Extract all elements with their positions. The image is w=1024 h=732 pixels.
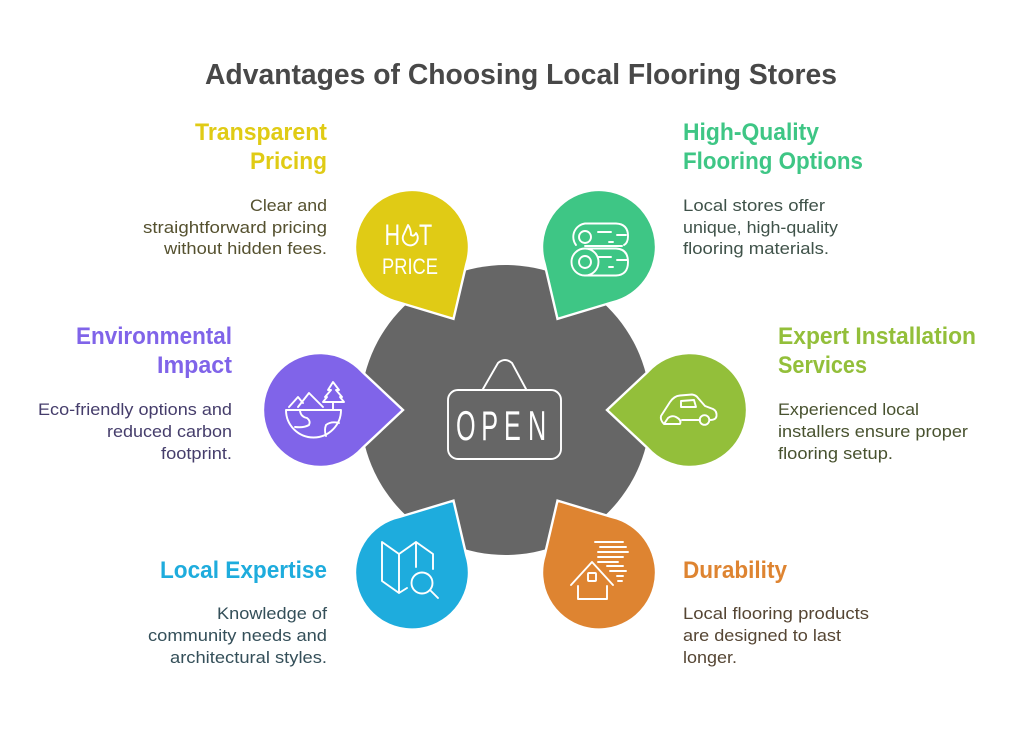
text block: transparent pricing: Clear and [250, 196, 327, 215]
text block: environmental impact: reduced carbon [107, 422, 232, 441]
text block: environmental impact: Impact [157, 352, 232, 379]
icon: car [661, 394, 717, 425]
text block: expert installation services: Experienced local [778, 400, 919, 419]
panel: local expertise drop [334, 472, 503, 650]
icon: hot price tag [382, 217, 438, 279]
text block: local expertise [148, 557, 327, 667]
text block: high-quality flooring options: unique, high-quality [683, 218, 839, 237]
text block: durability: Durability [683, 557, 788, 584]
text block: high-quality flooring options [683, 119, 863, 258]
icon: open sign: OPEN [456, 404, 546, 450]
panel: transparent pricing drop [334, 169, 503, 347]
text block: expert installation services [778, 323, 976, 463]
text block: transparent pricing: Transparent [195, 119, 327, 146]
text block: high-quality flooring options: High-Quality [683, 119, 820, 146]
text block: expert installation services: Expert Installation [778, 323, 976, 350]
text block: durability: Local flooring products [683, 604, 869, 623]
text block: expert installation services: flooring setup. [778, 444, 893, 463]
text block: transparent pricing [143, 119, 327, 258]
text block: high-quality flooring options: Flooring Options [683, 148, 863, 175]
icon: wooden logs [572, 224, 628, 276]
panel: durability drop [508, 472, 677, 650]
text block: local expertise: architectural styles. [170, 648, 327, 667]
text block: transparent pricing: Pricing [250, 148, 327, 175]
text block: high-quality flooring options: Local stores offer [683, 196, 825, 215]
text block: environmental impact [38, 323, 232, 463]
text block: durability [683, 557, 869, 667]
text block: high-quality flooring options: flooring materials. [683, 239, 829, 258]
title: Advantages of Choosing Local Flooring Stores [205, 59, 837, 91]
panel: high-quality flooring drop [508, 169, 677, 347]
text block: local expertise: community needs and [148, 626, 327, 645]
panel: expert installation drop [607, 353, 747, 467]
text block: transparent pricing: straightforward pricing [143, 218, 327, 237]
central grey circle [360, 265, 650, 555]
icon: hot price tag: HT [384, 217, 432, 252]
text block: local expertise: Knowledge of [217, 604, 327, 623]
text block: expert installation services: Services [778, 352, 867, 379]
icon: house in wind [571, 542, 628, 599]
icon: map with magnifier [382, 542, 438, 598]
icon: open sign [448, 360, 561, 459]
text block: durability: longer. [683, 648, 737, 667]
icon: earth with mountains and tree [286, 382, 344, 437]
text block: local expertise: Local Expertise [160, 557, 327, 584]
text block: expert installation services: installers ensure proper [778, 422, 968, 441]
text block: environmental impact: Eco-friendly options and [38, 400, 232, 419]
panel: environmental impact drop [263, 353, 403, 467]
text block: durability: are designed to last [683, 626, 841, 645]
icon: hot price tag: PRICE [382, 254, 438, 279]
text block: environmental impact: footprint. [161, 444, 232, 463]
text block: environmental impact: Environmental [76, 323, 232, 350]
text block: transparent pricing: without hidden fees. [163, 239, 327, 258]
